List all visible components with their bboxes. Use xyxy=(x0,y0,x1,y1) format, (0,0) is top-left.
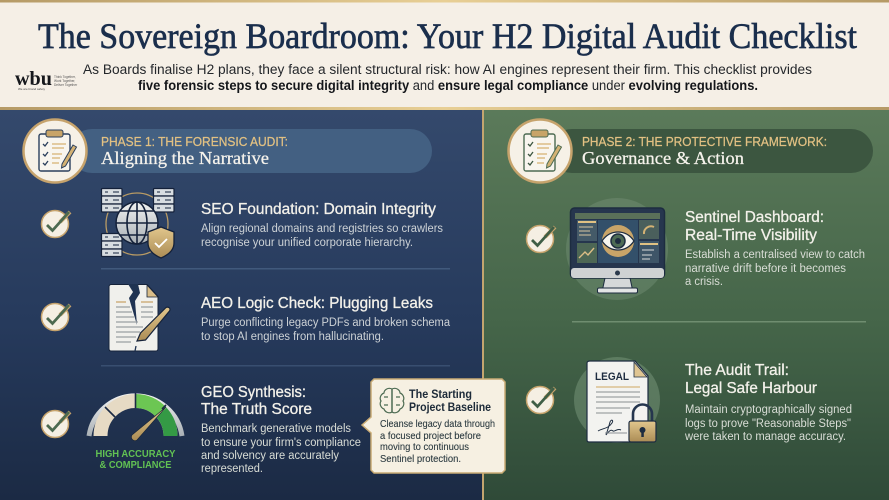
Audit trail text: logs to prove "Reasonable Steps" xyxy=(685,418,851,430)
callout: starting project baseline: moving to continuous xyxy=(380,441,469,453)
phase 2 header: Governance & Action xyxy=(582,148,744,168)
GEO text xyxy=(201,384,361,475)
GEO text: GEO Synthesis: xyxy=(201,384,306,401)
callout: starting project baseline: The Starting xyxy=(409,387,472,401)
AEO text: AEO Logic Check: Plugging Leaks xyxy=(201,295,433,312)
intro text: As Boards finalise H2 plans, they face a silent structural risk: how AI engines represent their firm. This checklist provides xyxy=(83,62,812,77)
Sentinel text: narrative drift before it becomes xyxy=(685,263,846,275)
gauge: high accuracy: & COMPLIANCE xyxy=(100,460,172,471)
phase 1 header xyxy=(24,120,432,182)
check badge 3 xyxy=(42,410,70,438)
icon: globe with servers and shield xyxy=(102,188,174,258)
Sentinel text: Establish a centralised view to catch xyxy=(685,249,865,261)
GEO text: represented. xyxy=(201,463,263,475)
callout: starting project baseline: a focused project before xyxy=(380,430,481,442)
check badge 1 xyxy=(42,210,70,238)
AEO text: Purge conflicting legacy PDFs and broken schema xyxy=(201,317,451,329)
intro text xyxy=(83,62,812,93)
callout: starting project baseline: Cleanse legacy data through xyxy=(380,418,495,430)
Sentinel text: a crisis. xyxy=(685,276,723,288)
SEO text: Align regional domains and registries so crawlers xyxy=(201,223,443,235)
Sentinel text xyxy=(685,209,865,288)
GEO text: The Truth Score xyxy=(201,401,312,418)
SEO text xyxy=(201,201,443,249)
gauge: high accuracy xyxy=(89,393,182,471)
check badge 4 xyxy=(526,226,555,252)
logo: wbu: Think Together, xyxy=(54,75,76,79)
gauge: high accuracy: HIGH ACCURACY xyxy=(96,449,176,460)
panel: phase 1 xyxy=(0,110,482,500)
icon: torn document with pen xyxy=(109,284,170,351)
GEO text: Benchmark generative models xyxy=(201,423,351,435)
phase 1 header: PHASE 1: THE FORENSIC AUDIT: xyxy=(101,135,288,149)
icon: brain xyxy=(380,388,404,413)
AEO text: to stop AI engines from hallucinating. xyxy=(201,331,384,343)
logo: wbu: Deliver Together xyxy=(54,83,78,87)
check badge 5 xyxy=(526,386,555,414)
intro text: five forensic steps to secure digital integrity and ensure legal compliance under evolving regulations. xyxy=(138,78,758,93)
callout: starting project baseline: Sentinel protection. xyxy=(380,453,461,465)
logo: wbu: wbu xyxy=(15,68,52,90)
panel: phase 2 xyxy=(484,110,889,500)
Audit trail text: Legal Safe Harbour xyxy=(685,380,817,397)
logo: wbu xyxy=(15,68,78,91)
title: The Sovereign Boardroom: Your H2 Digital Audit Checklist xyxy=(38,16,857,56)
callout: starting project baseline xyxy=(362,379,505,473)
icon: monitor with eye xyxy=(566,198,668,300)
header band xyxy=(0,0,889,110)
Sentinel text: Real-Time Visibility xyxy=(685,227,817,244)
phase 2 header: PHASE 2: THE PROTECTIVE FRAMEWORK: xyxy=(582,135,827,149)
logo: wbu: We are brand safety xyxy=(18,87,45,91)
icon: legal document with padlock xyxy=(574,357,660,443)
icon: legal document with padlock: LEGAL xyxy=(595,371,629,383)
SEO text: SEO Foundation: Domain Integrity xyxy=(201,201,436,218)
callout: starting project baseline: Project Baseline xyxy=(409,400,491,414)
check badge 2 xyxy=(42,304,70,330)
Audit trail text: The Audit Trail: xyxy=(685,362,789,379)
GEO text: and solvency are accurately xyxy=(201,450,339,462)
Audit trail text: Maintain cryptographically signed xyxy=(685,404,852,416)
Audit trail text: were taken to manage accuracy. xyxy=(684,431,846,443)
phase 1 header: Aligning the Narrative xyxy=(101,148,269,168)
Sentinel text: Sentinel Dashboard: xyxy=(685,209,824,226)
Audit trail text xyxy=(684,362,852,443)
phase 2 header xyxy=(508,120,873,182)
AEO text xyxy=(201,295,451,343)
centre divider xyxy=(482,110,484,500)
logo: wbu: Work Together, xyxy=(54,79,76,83)
GEO text: to ensure your firm's compliance xyxy=(201,437,361,449)
SEO text: recognise your unified corporate hierarchy. xyxy=(201,237,413,249)
